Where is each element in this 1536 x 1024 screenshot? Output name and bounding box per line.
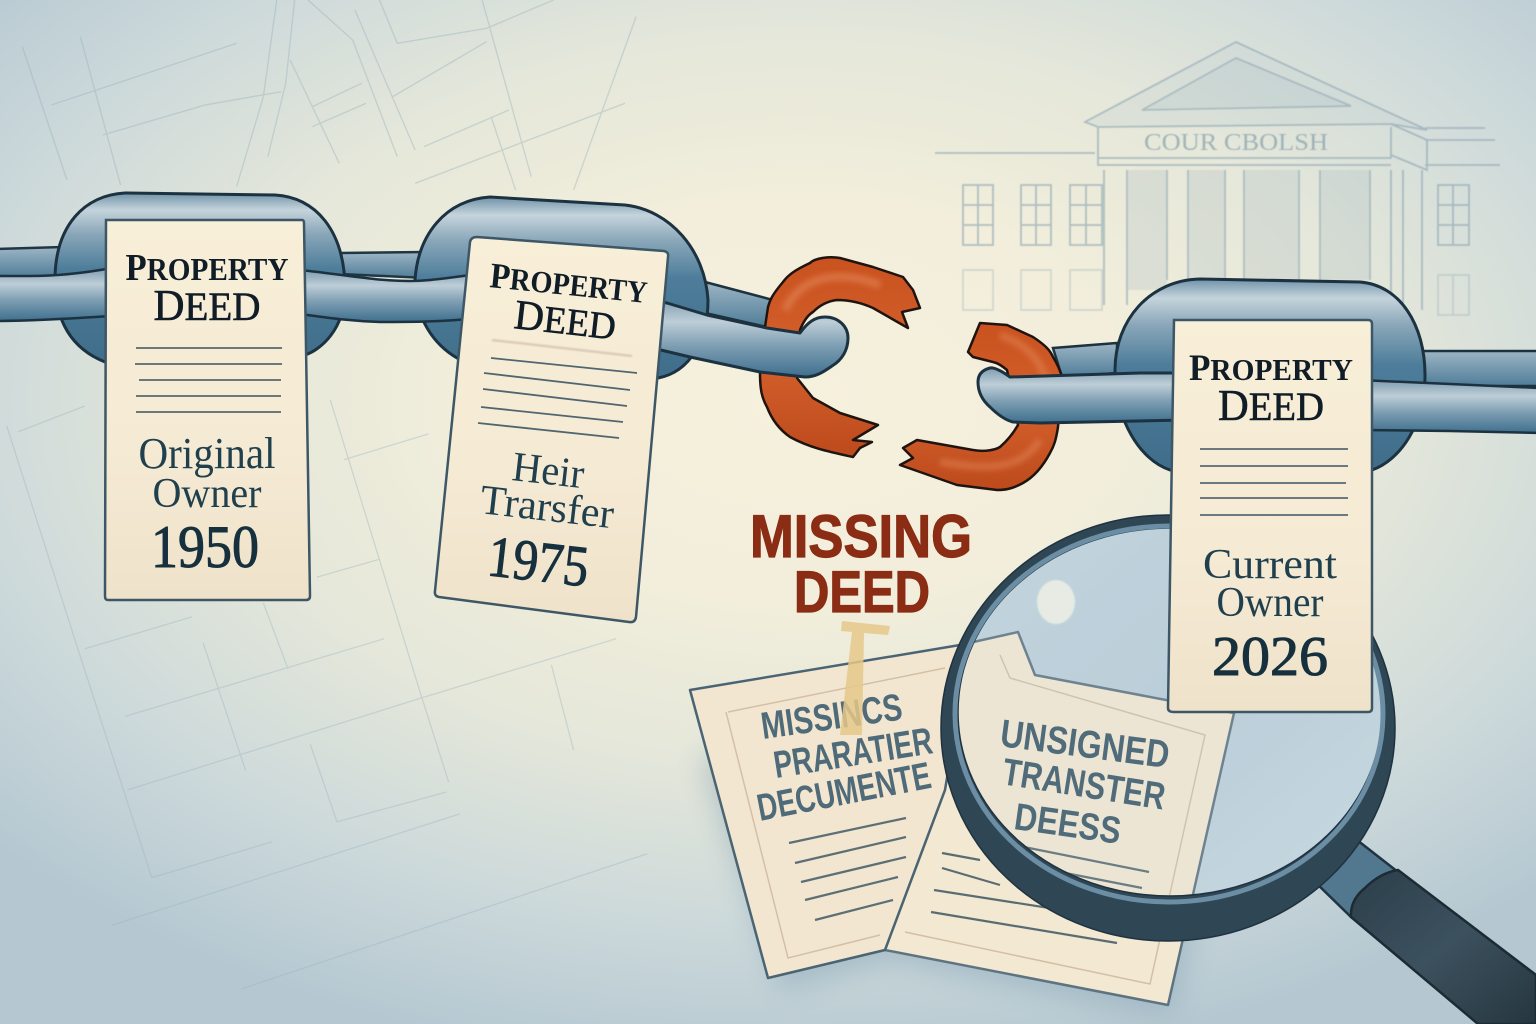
- paper: missing preparatory documents: PRARATIER: [771, 720, 935, 787]
- faint survey map: lower left: [7, 400, 647, 989]
- faint survey map: upper left: [22, 0, 636, 190]
- deed card 1: original owner 1950: Original: [138, 429, 276, 478]
- chain link 2 with bars: [300, 197, 773, 378]
- chain link 1 with bars: [0, 193, 425, 362]
- paper: unsigned transfer deeds: DEESS: [1012, 796, 1124, 853]
- paper: missing preparatory documents: DECUMENTE: [754, 755, 934, 830]
- deed card 2: heir transfer 1975: PROPERTY: [488, 255, 649, 311]
- deed card 1: original owner 1950: DEED: [154, 281, 260, 330]
- deed card 3: current owner 2026: 2026: [1212, 626, 1328, 688]
- deed card 1: original owner 1950: 1950: [151, 514, 259, 580]
- missing deed heading: [750, 503, 972, 625]
- deed card 3: current owner 2026: Current: [1203, 542, 1337, 588]
- courthouse sketch: [935, 42, 1500, 315]
- deed card 2: heir transfer 1975: DEED: [512, 292, 618, 349]
- deed card 2: heir transfer 1975: 1975: [485, 523, 592, 599]
- paper: unsigned transfer deeds: [885, 632, 1234, 1005]
- chain link 4: [978, 279, 1536, 470]
- paper shadow: [700, 660, 1240, 1015]
- paper: missing preparatory documents: MISSINCS: [758, 687, 905, 748]
- paper: unsigned transfer deeds: UNSIGNED: [998, 712, 1172, 777]
- broken link: right half: [900, 323, 1117, 490]
- courthouse sign: COUR CBOLSH: [1144, 130, 1328, 156]
- chain link 3: left side hooked into break: [640, 298, 848, 377]
- deed card 2: heir transfer 1975: Heir: [510, 444, 587, 498]
- broken link: left half: [760, 257, 920, 457]
- paper: missing preparatory documents: [690, 645, 960, 978]
- deed card 2: heir transfer 1975: [435, 237, 668, 622]
- deed card 3: current owner 2026: [1168, 320, 1372, 712]
- deed card 3: current owner 2026: PROPERTY: [1189, 348, 1353, 389]
- deed card 3: current owner 2026: Owner: [1216, 580, 1324, 626]
- tape pin: [840, 621, 890, 735]
- deed card 2: heir transfer 1975: Trarsfer: [478, 477, 616, 538]
- deed card 1: original owner 1950: Owner: [152, 471, 262, 517]
- paper: unsigned transfer deeds: TRANSTER: [1000, 751, 1168, 819]
- deed card 1: original owner 1950: [105, 220, 310, 600]
- missing deed heading: MISSING: [750, 503, 972, 570]
- missing deed heading: DEED: [794, 560, 930, 625]
- deed card 3: current owner 2026: DEED: [1218, 381, 1324, 430]
- magnifying glass: [941, 515, 1536, 1024]
- deed card 1: original owner 1950: PROPERTY: [126, 247, 288, 289]
- lens backing: [956, 526, 1384, 898]
